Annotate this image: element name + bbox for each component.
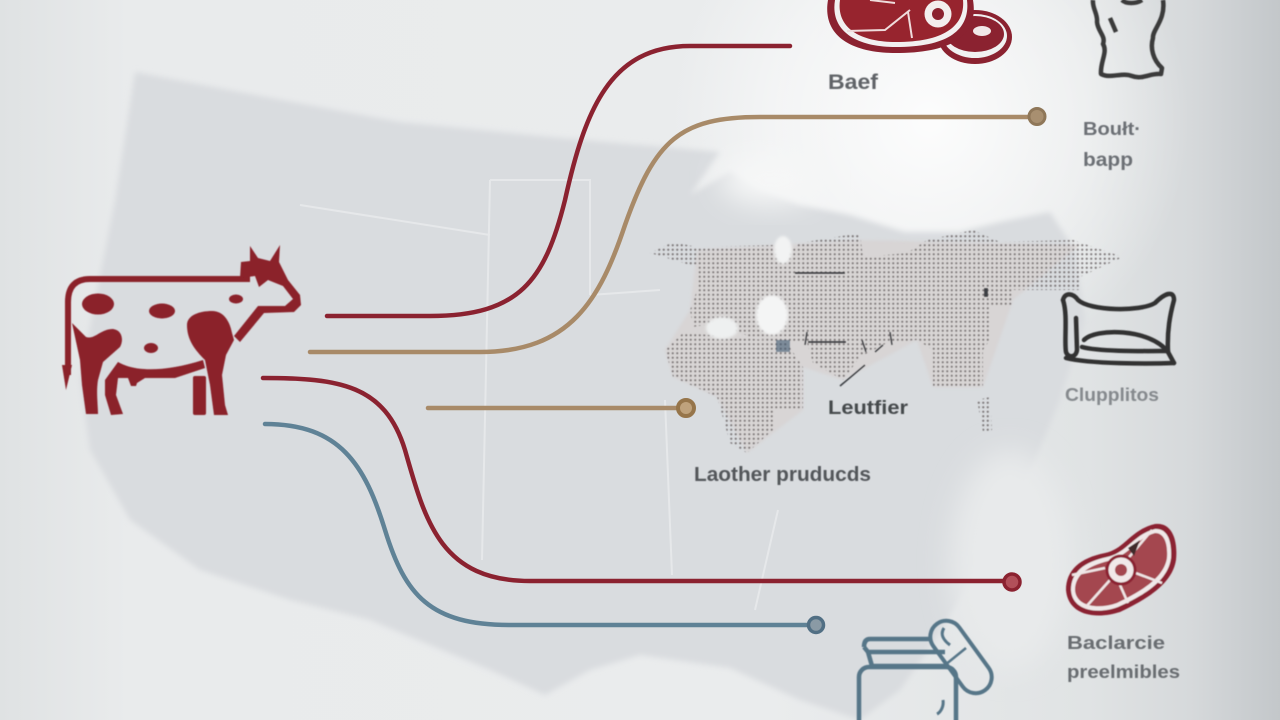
- label: Baef: Baef: [828, 71, 879, 94]
- connector: meat line: [263, 378, 1020, 590]
- icon: cow: [62, 245, 301, 415]
- map: United States silhouette: [80, 72, 1085, 720]
- label: Leutfier: Leutfier: [828, 398, 909, 419]
- label: Laother pruducds: Laother pruducds: [694, 464, 871, 486]
- connector: hide line: [310, 108, 1045, 352]
- label: Bout bapp: bapp: [1083, 150, 1133, 171]
- connector: pharmaceuticals line: [265, 424, 824, 632]
- label: Baclarcie preelmibles: preelmibles: [1067, 662, 1180, 682]
- icon: hide: [1093, 0, 1163, 77]
- icon: steak: [1066, 524, 1176, 616]
- icon: couch: [1063, 294, 1174, 363]
- label: Bout bapp: Boułt·: [1083, 119, 1141, 139]
- connector: beef line: [327, 46, 790, 316]
- label: Clupplitos: Clupplitos: [1065, 385, 1159, 405]
- label: Bout bapp: [1083, 119, 1141, 171]
- label: Baclarcie preelmibles: Baclarcie: [1067, 633, 1165, 653]
- icon: beef steaks: [827, 0, 1012, 64]
- connector: leather line: [428, 400, 694, 416]
- dotted world map: [650, 230, 1123, 453]
- label: Baclarcie preelmibles: [1067, 633, 1180, 682]
- icon: jar and capsule: [859, 614, 998, 720]
